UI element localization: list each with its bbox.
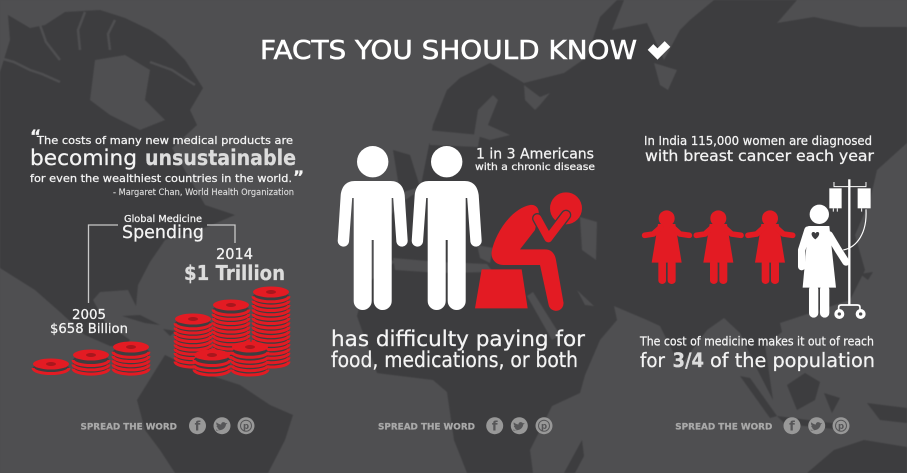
- 2005 label: 2005: [72, 307, 106, 323]
- quote: The costs of many new medical products are: [36, 134, 293, 147]
- panel: India breast cancer: [639, 134, 875, 434]
- quote: becoming: [30, 146, 137, 171]
- heading: with breast cancer each year: [645, 147, 875, 165]
- share row 3: [675, 417, 850, 434]
- coins: 2014 large stacks: [175, 286, 289, 375]
- icon: man one: [338, 146, 408, 310]
- quote: for even the wealthiest countries in the world.: [30, 172, 292, 185]
- icon: man two: [412, 146, 482, 310]
- 2014 label: $1 Trillion: [184, 261, 285, 285]
- icon: seated red figure: [475, 192, 582, 311]
- quote: ”: [293, 168, 304, 188]
- statistic: [475, 146, 595, 173]
- 2005 label: [50, 307, 128, 337]
- share row 3: SPREAD THE WORD: [675, 423, 772, 433]
- spending heading: Spending: [122, 223, 204, 243]
- share row 2: f: [492, 420, 498, 434]
- caption: of the population: [710, 349, 875, 372]
- caption: [639, 335, 875, 372]
- caption: food, medications, or both: [331, 348, 578, 372]
- quote: unsustainable: [145, 146, 296, 171]
- icon: check mark: [650, 44, 668, 54]
- share row 3: f: [789, 420, 795, 434]
- panel: chronic disease: [331, 146, 595, 434]
- share row 2: [378, 417, 552, 434]
- quote: [30, 127, 304, 198]
- bracket lines: [88, 225, 235, 303]
- quote: - Margaret Chan, World Health Organization: [113, 188, 294, 198]
- quote: “: [30, 127, 41, 147]
- title: FACTS YOU SHOULD KNOW: [260, 36, 637, 66]
- icon: patient with IV stand: [802, 179, 871, 319]
- share row 1: [80, 417, 254, 434]
- share row 1: SPREAD THE WORD: [80, 423, 177, 433]
- coins: 2005 small stacks: [33, 342, 149, 374]
- share row 3: p: [838, 422, 844, 432]
- share row 1: f: [195, 420, 201, 434]
- caption: 3/4: [672, 349, 704, 372]
- panel: medicine spending: [30, 127, 304, 434]
- spending heading: Global Medicine: [124, 214, 202, 225]
- caption: has difficulty paying for: [331, 327, 585, 351]
- statistic: with a chronic disease: [475, 162, 595, 173]
- heading: In India 115,000 women are diagnosed: [644, 134, 872, 148]
- spending heading: [122, 214, 204, 243]
- 2005 label: $658 Billion: [50, 321, 128, 337]
- 2014 label: [184, 245, 285, 285]
- share row 2: SPREAD THE WORD: [378, 423, 475, 433]
- caption: for: [640, 349, 666, 372]
- statistic: 1 in 3 Americans: [476, 146, 594, 162]
- caption: The cost of medicine makes it out of reach: [639, 335, 874, 349]
- heading: [644, 134, 875, 165]
- share row 2: p: [541, 422, 547, 432]
- icon: three red women: [645, 210, 793, 284]
- share row 1: p: [243, 422, 249, 432]
- 2014 label: 2014: [216, 245, 253, 263]
- caption: [331, 327, 585, 372]
